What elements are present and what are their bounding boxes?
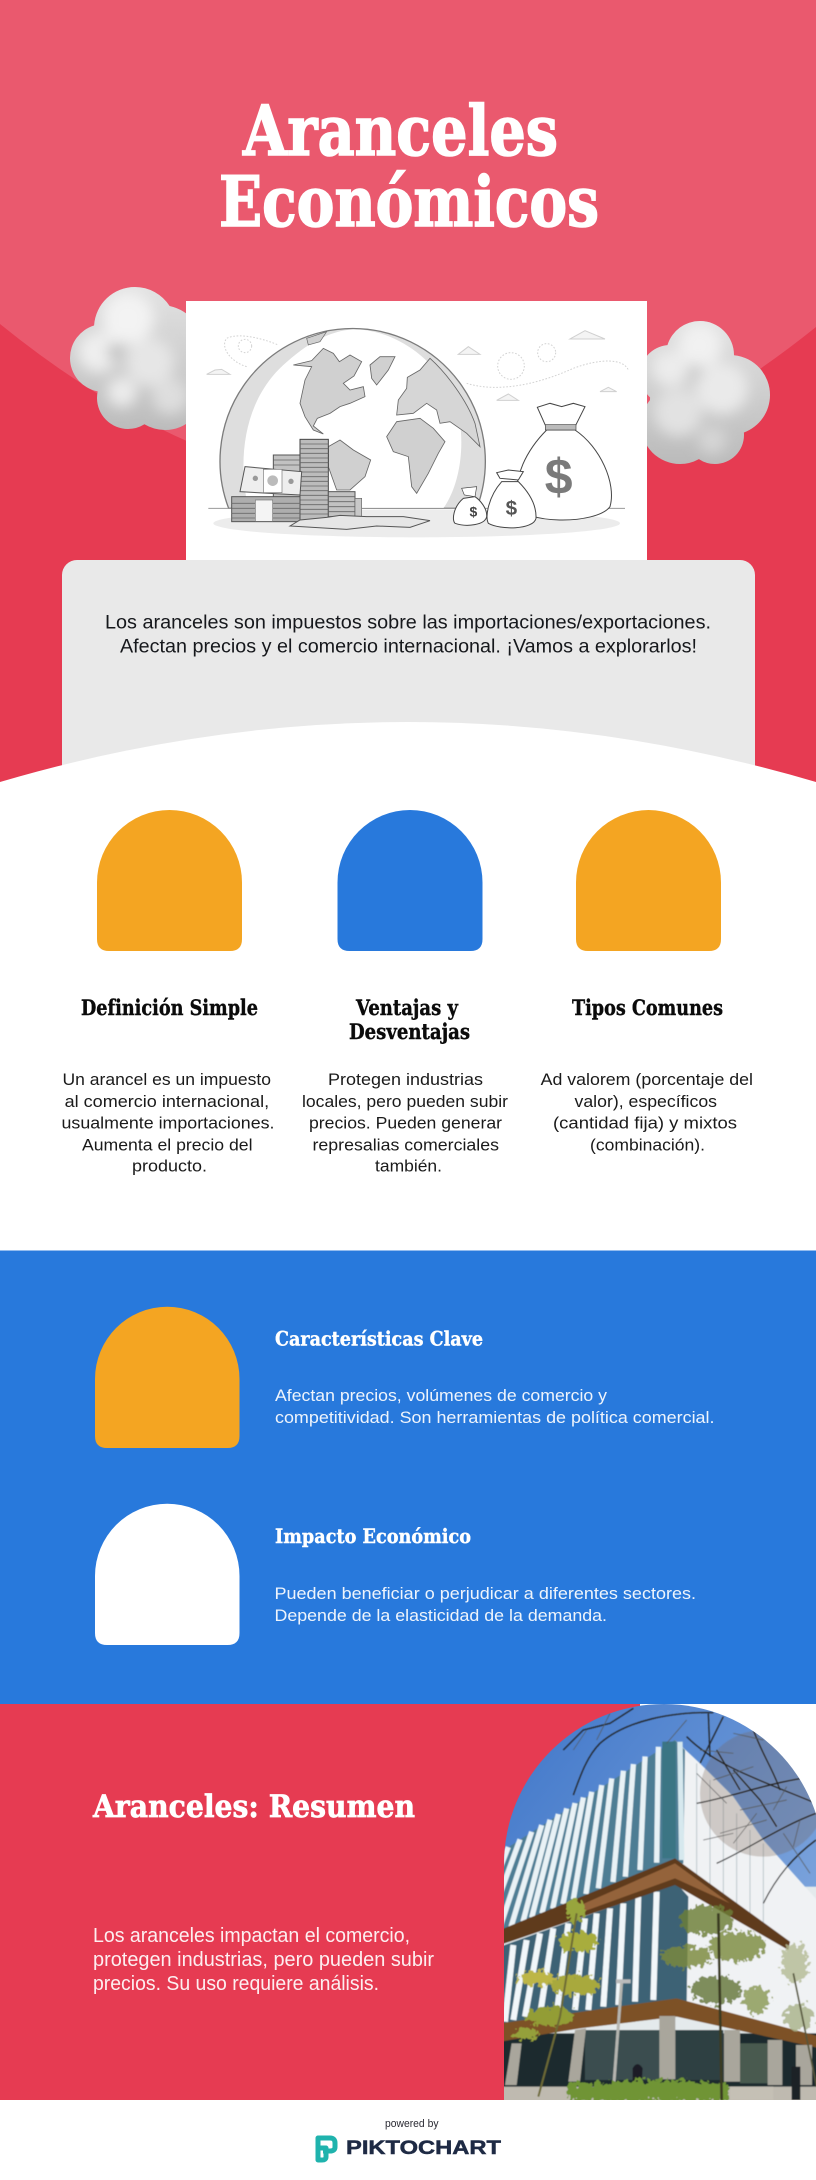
- title: Aranceles: [242, 91, 558, 172]
- icon: Piktochart logo: [318, 2138, 335, 2160]
- body text: Protegen industrias: [328, 1070, 483, 1089]
- coin stacks: [273, 455, 301, 498]
- body text: [62, 1070, 274, 1176]
- heading: Definición Simple: [81, 995, 258, 1020]
- heading: Aranceles: Resumen: [92, 1789, 415, 1825]
- body text: [541, 1070, 753, 1154]
- body text: Ad valorem (porcentaje del: [541, 1070, 753, 1089]
- lower left level: [500, 1883, 688, 2025]
- panel: column advantages: [302, 810, 508, 1176]
- money bags: [516, 430, 611, 520]
- person: [632, 2064, 643, 2081]
- photo: modern building: [504, 1704, 816, 2100]
- body text: (cantidad fija) y mixtos: [553, 1114, 737, 1132]
- body text: al comercio internacional,: [65, 1092, 269, 1111]
- panel: blue section: [0, 1250, 816, 1704]
- body text: Afectan precios, volúmenes de comercio y: [275, 1386, 608, 1405]
- sky decoration: [225, 336, 628, 387]
- lower backing: [500, 1887, 816, 2040]
- illustration: globe with money: $: [506, 497, 518, 520]
- body text: [302, 1070, 508, 1176]
- hedge: [568, 2080, 728, 2102]
- panel: summary: [0, 1704, 640, 2100]
- ground floor: [500, 2033, 816, 2090]
- intro text: [105, 612, 711, 658]
- ground: [500, 2087, 816, 2102]
- footer: powered by Piktochart: powered by: [385, 2118, 439, 2130]
- feature: economic impact: [95, 1504, 696, 1645]
- icon: right cloud: [647, 321, 770, 464]
- heading: Características Clave: [275, 1326, 483, 1350]
- lower overhang: [500, 1998, 816, 2048]
- body text: precios. Su uso requiere análisis.: [93, 1973, 379, 1995]
- icon placeholder: orange arch: [576, 810, 721, 951]
- illustration: globe with money: $: [469, 504, 477, 520]
- icon placeholder: blue arch: [338, 810, 482, 951]
- heading: Impacto Económico: [275, 1524, 471, 1548]
- heading: Desventajas: [349, 1019, 470, 1044]
- heading: Tipos Comunes: [572, 995, 723, 1020]
- body text: [93, 1925, 434, 1995]
- haze of bare branches: [700, 1730, 816, 1857]
- footer: powered by Piktochart: PIKTOCHART: [346, 2138, 501, 2159]
- upper overhang: [500, 1858, 790, 1950]
- ground line: [208, 507, 625, 510]
- globe: [220, 329, 485, 508]
- illustration: globe with money: [186, 301, 647, 560]
- illustration: globe with money: $: [545, 449, 573, 505]
- body text: usualmente importaciones.: [62, 1114, 274, 1132]
- body text: precios. Pueden generar: [309, 1114, 502, 1132]
- upper left glass face: [500, 1740, 685, 1933]
- body text: represalias comerciales: [312, 1136, 499, 1154]
- body text: también.: [375, 1156, 442, 1176]
- header background: [0, 0, 816, 800]
- right white face: [675, 1740, 816, 2037]
- banknotes: [240, 467, 302, 495]
- icon: left cloud: [70, 287, 186, 430]
- body text: Los aranceles impactan el comercio,: [93, 1925, 410, 1947]
- body text: valor), específicos: [574, 1092, 717, 1111]
- bollard: [792, 2067, 800, 2100]
- intro text: Afectan precios y el comercio internacional. ¡Vamos a explorarlos!: [120, 636, 697, 658]
- body text: (combinación).: [590, 1136, 705, 1154]
- icon placeholder: orange arch: [95, 1307, 240, 1448]
- body text: [275, 1386, 714, 1427]
- ground shadow: [213, 509, 620, 537]
- heading: Ventajas y: [355, 995, 459, 1020]
- body text: competitividad. Son herramientas de política comercial.: [275, 1408, 714, 1427]
- title: [219, 91, 599, 243]
- body text: protegen industrias, pero pueden subir: [93, 1949, 434, 1971]
- body text: Depende de la elasticidad de la demanda.: [274, 1606, 607, 1625]
- panel: column types: [541, 810, 753, 1154]
- icon placeholder: orange arch: [97, 810, 242, 951]
- body text: [274, 1584, 696, 1625]
- footer: powered by Piktochart: [318, 2118, 501, 2160]
- columns: [505, 2016, 812, 2085]
- body text: Un arancel es un impuesto: [62, 1070, 271, 1089]
- panel: column definition: [62, 810, 274, 1176]
- right trees: [662, 1905, 813, 2030]
- feature: key characteristics: [95, 1307, 714, 1448]
- title: Económicos: [219, 162, 599, 243]
- lamp post: [613, 1982, 622, 2100]
- left tree: [515, 1899, 600, 2039]
- intro text: Los aranceles son impuestos sobre las importaciones/exportaciones.: [105, 612, 711, 634]
- icon placeholder: white arch: [95, 1504, 240, 1645]
- white section with curved top: [0, 722, 816, 1251]
- body text: producto.: [132, 1156, 207, 1176]
- body text: Aumenta el precio del: [82, 1136, 252, 1154]
- heading: [349, 995, 470, 1044]
- panel: intro: [62, 560, 755, 800]
- body text: locales, pero pueden subir: [302, 1092, 508, 1111]
- body text: Pueden beneficiar o perjudicar a diferentes sectores.: [274, 1584, 696, 1603]
- bare branches: [563, 1708, 816, 1903]
